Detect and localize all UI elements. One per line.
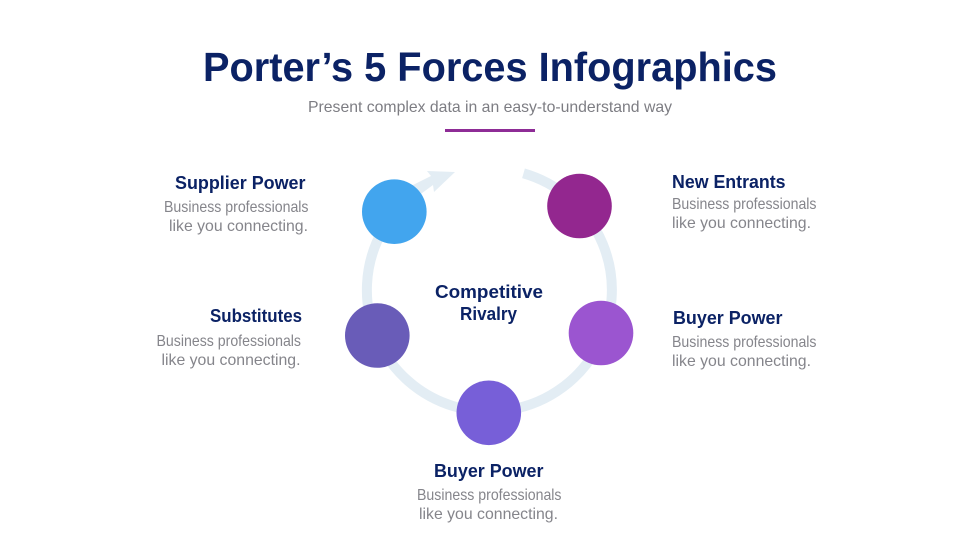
title: Porter’s 5 Forces Infographics bbox=[203, 44, 777, 90]
text block: substitutes: like you connecting. bbox=[162, 352, 300, 369]
subtitle: Present complex data in an easy-to-understand way bbox=[308, 99, 672, 116]
text block: supplier power: like you connecting. bbox=[169, 218, 308, 235]
circle: buyer power right bbox=[569, 301, 633, 365]
text block: substitutes bbox=[156, 305, 302, 369]
circle: new entrants bbox=[547, 174, 612, 238]
text block: buyer power right bbox=[672, 307, 816, 370]
text block: supplier power: Business professionals bbox=[164, 199, 308, 216]
text block: buyer power right: like you connecting. bbox=[672, 353, 811, 370]
text block: buyer power bottom: Business professionals bbox=[417, 487, 562, 504]
text block: buyer power right: Business professionals bbox=[672, 334, 816, 351]
text block: supplier power: Supplier Power bbox=[175, 172, 306, 193]
text block: new entrants: Business professionals bbox=[672, 196, 816, 213]
text block: supplier power bbox=[164, 172, 308, 235]
circle: supplier power bbox=[362, 179, 427, 244]
text block: buyer power bottom bbox=[417, 460, 562, 523]
circle: buyer power bottom bbox=[456, 380, 521, 445]
circle: substitutes bbox=[345, 303, 410, 368]
text block: buyer power bottom: like you connecting. bbox=[419, 506, 558, 523]
text block: new entrants bbox=[672, 171, 816, 232]
text block: new entrants: New Entrants bbox=[672, 171, 786, 192]
center label: competitive rivalry bbox=[435, 281, 543, 324]
center label: competitive rivalry: Rivalry bbox=[460, 303, 518, 324]
text block: substitutes: Substitutes bbox=[210, 305, 302, 326]
center label: competitive rivalry: Competitive bbox=[435, 281, 543, 302]
title underline bbox=[445, 129, 535, 132]
text block: new entrants: like you connecting. bbox=[672, 215, 811, 232]
text block: buyer power bottom: Buyer Power bbox=[434, 460, 544, 481]
text block: buyer power right: Buyer Power bbox=[673, 307, 782, 328]
text block: substitutes: Business professionals bbox=[156, 333, 301, 350]
cycle ring with arrow bbox=[367, 171, 612, 411]
